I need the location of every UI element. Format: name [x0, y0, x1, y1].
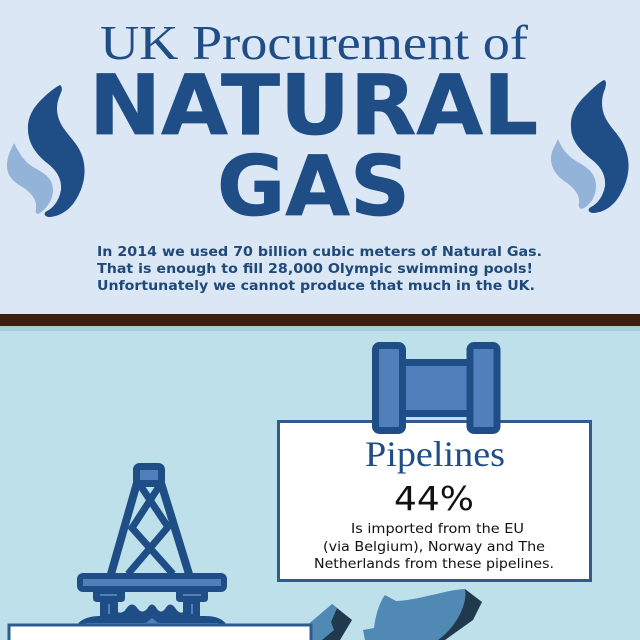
panel: pipelines — [278, 422, 590, 580]
pipelines percentage: 44% — [394, 479, 474, 518]
intro text: That is enough to fill 28,000 Olympic swimming pools! — [97, 261, 533, 277]
title line: UK Procurement of: UK Procurement of — [100, 15, 529, 70]
icon: pipeline — [376, 346, 497, 430]
pipelines heading: Pipelines — [365, 434, 505, 474]
divider bar — [0, 314, 640, 331]
pipelines description: Netherlands from these pipelines. — [314, 556, 554, 572]
pipelines description — [314, 521, 554, 572]
title word: NATURAL: NATURAL — [89, 57, 538, 154]
map: UK and Ireland silhouette — [305, 589, 482, 640]
title word: GAS: GAS — [217, 138, 410, 235]
intro text: Unfortunately we cannot produce that much in the UK. — [97, 278, 535, 294]
icon: right flame — [551, 80, 629, 213]
header panel — [0, 0, 640, 314]
pipelines description: Is imported from the EU — [351, 521, 524, 537]
pipelines description: (via Belgium), Norway and The — [323, 539, 545, 555]
icon: left flame — [7, 85, 85, 217]
panel: gas fields (cropped) — [9, 625, 311, 640]
intro text: In 2014 we used 70 billion cubic meters of Natural Gas. — [97, 244, 542, 260]
icon: gas rig — [78, 466, 226, 625]
intro text — [97, 244, 542, 294]
